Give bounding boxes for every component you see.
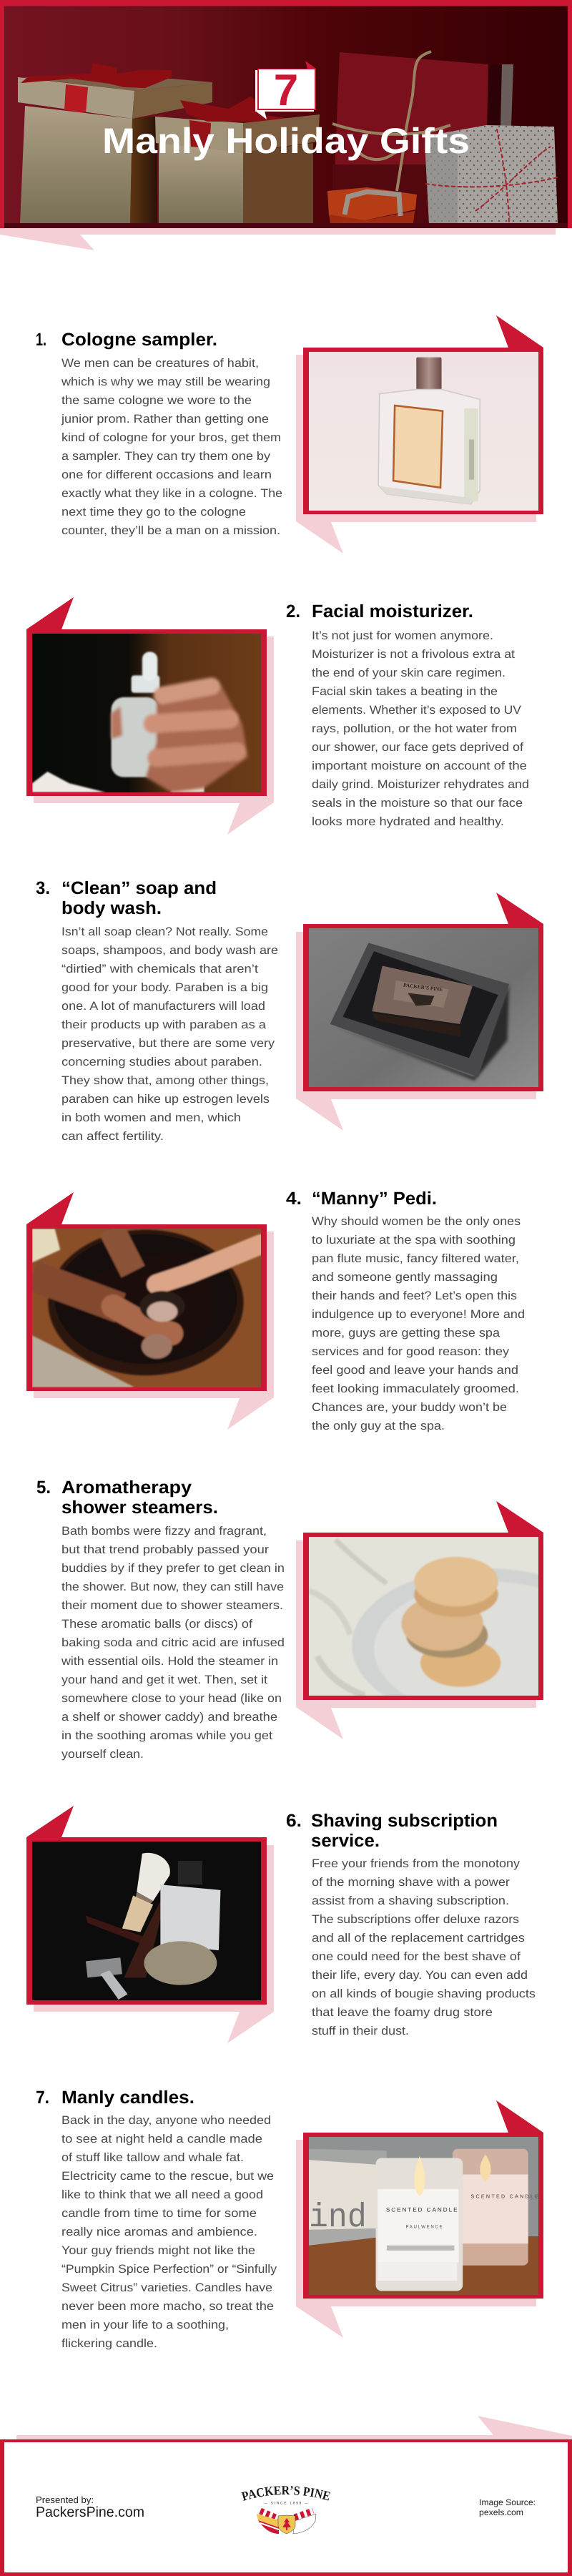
body text 2: It’s not just for women anymore.: [312, 629, 493, 642]
body text 3: paraben can hike up estrogen levels: [61, 1093, 270, 1106]
image source text: pexels.com: [479, 2507, 523, 2517]
logo: Packer's Pine crest: PACKER’S PINE: [241, 2486, 330, 2501]
body text 3: “dirtied” with chemicals that aren’t: [61, 963, 258, 975]
body text 3: preservative, but there are some very: [61, 1037, 275, 1050]
panel: footer: [0, 2416, 572, 2576]
heading 5: 5.: [36, 1478, 51, 1498]
body text 3: their products up with paraben as a: [61, 1018, 267, 1031]
heading 3: body wash.: [61, 898, 162, 918]
body text 1: [61, 357, 282, 537]
heading 2: Facial moisturizer.: [312, 601, 473, 621]
body text 3: soaps, shampoos, and body wash are: [61, 944, 278, 957]
body text 5: with essential oils. Hold the steamer in: [61, 1655, 278, 1668]
heading 5: Aromatherapy: [61, 1478, 192, 1498]
body text 6: on all kinds of bougie shaving products: [312, 1987, 536, 2000]
icon: number 7 speech badge: [255, 61, 316, 119]
title: Manly Holiday Gifts: [102, 121, 470, 161]
body text 1: next time they go to the cologne: [61, 506, 246, 518]
presented by text: [36, 2494, 144, 2520]
body text 2: looks more hydrated and healthy.: [312, 815, 504, 828]
body text 2: daily grind. Moisturizer rehydrates and: [312, 778, 529, 791]
photo: soap bar in dish: PACKER’S PINE: [403, 983, 443, 993]
body text 3: in both women and men, which: [61, 1111, 241, 1124]
panel: item 7 manly candles: [36, 2088, 543, 2350]
pink shadow 5: [296, 1540, 536, 1739]
heading 4: “Manny” Pedi.: [312, 1189, 437, 1209]
photo: shaving brush, bottle and razor: [32, 1842, 261, 2000]
red frame 4: [26, 1192, 267, 1391]
body text 4: feel good and leave your hands and: [312, 1364, 518, 1377]
body text 7: men in your life to a soothing,: [61, 2319, 229, 2331]
body text 1: exactly what they like in a cologne. The: [61, 487, 282, 500]
heading 7: 7.: [36, 2088, 49, 2108]
heading 6: Shaving subscription: [311, 1811, 498, 1831]
body text 2: Moisturizer is not a frivolous extra at: [312, 648, 515, 661]
body text 3: good for your body. Paraben is a big: [61, 981, 268, 994]
heading 5: shower steamers.: [61, 1498, 218, 1518]
pink shadow 3: [296, 932, 536, 1131]
heading 2: 2.: [286, 601, 300, 621]
heading 3: “Clean” soap and: [61, 878, 217, 898]
body text 3: concerning studies about paraben.: [61, 1056, 262, 1068]
body text 1: kind of cologne for your bros, get them: [61, 431, 281, 444]
body text 6: one could need for the best shave of: [312, 1950, 521, 1963]
body text 5: the shower. But now, they can still have: [61, 1580, 284, 1593]
photo: scented candles: ind: [309, 2198, 367, 2236]
body text 4: indulgence up to everyone! More and: [312, 1308, 525, 1321]
photo: scented candles: SCENTED CANDLE: [470, 2193, 538, 2199]
body text 6: stuff in their dust.: [312, 2025, 409, 2037]
panel: item 3 clean soap and body wash: [36, 878, 543, 1143]
body text 2: Facial skin takes a beating in the: [312, 685, 498, 698]
body text 6: The subscriptions offer deluxe razors: [312, 1913, 519, 1926]
body text 6: that leave the foamy drug store: [312, 2006, 493, 2019]
panel: header: [0, 0, 572, 250]
photo: soap bar in dish: [309, 928, 538, 1087]
logo: Packer's Pine crest: [241, 2486, 330, 2535]
body text 1: We men can be creatures of habit,: [61, 357, 259, 370]
panel: item 1 cologne sampler: [36, 315, 543, 554]
body text 3: can affect fertility.: [61, 1130, 164, 1143]
photo: dropper bottle in hand: [32, 634, 261, 792]
body text 2: seals in the moisture so that our face: [312, 797, 523, 810]
heading 1: Cologne sampler.: [61, 330, 217, 350]
presented by text: PackersPine.com: [36, 2504, 144, 2520]
body text 4: more, guys are getting these spa: [312, 1327, 500, 1339]
heading 1: 1.: [36, 330, 46, 350]
heading 4: 4.: [286, 1189, 302, 1209]
body text 6: Free your friends from the monotony: [312, 1857, 521, 1870]
body text 5: buddies by if they prefer to get clean in: [61, 1562, 285, 1575]
body text 7: never been more macho, so treat the: [61, 2300, 274, 2313]
body text 5: baking soda and citric acid are infused: [61, 1636, 285, 1649]
body text 6: and all of the replacement cartridges: [312, 1932, 525, 1945]
body text 4: Why should women be the only ones: [312, 1215, 521, 1228]
red frame 7: [303, 2100, 543, 2299]
pink shadow 7: [296, 2140, 536, 2338]
body text 1: a sampler. They can try them one by: [61, 450, 271, 463]
icon: number 7 speech badge: 7: [274, 66, 298, 115]
photo: scented candles: PAULWENCE: [405, 2224, 443, 2229]
body text 6: assist from a shaving subscription.: [312, 1894, 509, 1907]
red frame 2: [26, 597, 267, 796]
footer frame: [0, 2439, 572, 2576]
heading 5: [36, 1478, 218, 1518]
body text 7: really nice aromas and ambience.: [61, 2226, 257, 2238]
red frame 5: [303, 1501, 543, 1700]
body text 4: services and for good reason: they: [312, 1345, 510, 1358]
body text 7: like to think that we all need a good: [61, 2188, 263, 2201]
photo: scented candles: [309, 2137, 538, 2295]
body text 5: yourself clean.: [61, 1748, 144, 1761]
heading 7: Manly candles.: [61, 2088, 194, 2108]
body text 7: Your guy friends might not like the: [61, 2244, 255, 2257]
pink shadow 1: [296, 355, 536, 554]
heading 6: [286, 1811, 498, 1851]
body text 1: the same cologne we wore to the: [61, 394, 252, 407]
body text 2: important moisture on account of the: [312, 759, 527, 772]
body text 6: their life, every day. You can even add: [312, 1969, 528, 1982]
heading 6: 6.: [286, 1811, 302, 1831]
body text 5: their moment due to shower steamers.: [61, 1599, 283, 1612]
body text 4: feet looking immaculately groomed.: [312, 1382, 519, 1395]
body text 4: [312, 1215, 525, 1432]
header photo: gift boxes: [4, 6, 568, 228]
pink shadow 6: [34, 1845, 274, 2043]
body text 7: candle from time to time for some: [61, 2207, 257, 2220]
panel: item 2 facial moisturizer: [26, 597, 529, 835]
body text 2: the end of your skin care regimen.: [312, 667, 506, 679]
body text 7: [61, 2114, 277, 2350]
footer pink strip with tail: [16, 2416, 572, 2439]
panel: item 5 aromatherapy shower steamers: [36, 1478, 572, 1761]
body text 1: junior prom. Rather than getting one: [61, 413, 269, 426]
body text 5: somewhere close to your head (like on: [61, 1692, 282, 1705]
body text 7: flickering candle.: [61, 2337, 157, 2350]
body text 2: rays, pollution, or the hot water from: [312, 722, 517, 735]
body text 7: Electricity came to the rescue, but we: [61, 2170, 274, 2183]
body text 7: of stuff like tallow and whale fat.: [61, 2151, 244, 2164]
photo: stacked soap discs on plate: [309, 1537, 538, 1696]
body text 5: but that trend probably passed your: [61, 1543, 270, 1556]
panel: item 6 shaving subscription service: [26, 1806, 536, 2043]
red frame 1: [303, 315, 543, 514]
body text 7: to see at night held a candle made: [61, 2133, 262, 2145]
image source text: Image Source:: [479, 2497, 536, 2507]
body text 7: “Pumpkin Spice Perfection” or “Sinfully: [61, 2263, 277, 2276]
body text 5: in the soothing aromas while you get: [61, 1729, 272, 1742]
image source text: [479, 2497, 536, 2517]
photo: foot spa bowl: [32, 1229, 261, 1387]
logo: Packer's Pine crest: — SINCE 1899 —: [264, 2502, 308, 2506]
body text 1: counter, they’ll be a man on a mission.: [61, 524, 280, 537]
heading 3: [36, 878, 217, 918]
heading 3: 3.: [36, 878, 50, 898]
body text 5: a shelf or shower caddy) and breathe: [61, 1711, 277, 1724]
body text 4: their hands and feet? Let’s open this: [312, 1289, 517, 1302]
photo: scented candles: SCENTED CANDLE: [386, 2207, 458, 2213]
heading 6: service.: [311, 1831, 380, 1851]
red frame 3: [303, 893, 543, 1091]
presented by text: Presented by:: [36, 2494, 94, 2505]
body text 7: Back in the day, anyone who needed: [61, 2114, 271, 2127]
body text 4: Chances are, your buddy won’t be: [312, 1401, 507, 1414]
body text 2: our shower, our face gets deprived of: [312, 741, 523, 754]
header pink shadow with tail: [0, 228, 556, 250]
body text 5: Bath bombs were fizzy and fragrant,: [61, 1525, 267, 1538]
body text 6: [312, 1857, 536, 2037]
body text 3: They show that, among other things,: [61, 1074, 269, 1087]
body text 4: and someone gently massaging: [312, 1271, 498, 1284]
body text 3: one. A lot of manufacturers will load: [61, 1000, 265, 1013]
body text 4: pan flute music, fancy filtered water,: [312, 1252, 519, 1265]
body text 5: These aromatic balls (or discs) of: [61, 1618, 252, 1631]
body text 2: elements. Whether it’s exposed to UV: [312, 704, 521, 717]
body text 6: of the morning shave with a power: [312, 1876, 511, 1889]
body text 3: [61, 925, 278, 1143]
header red frame: [0, 0, 572, 228]
body text 1: which is why we may still be wearing: [61, 375, 270, 388]
body text 1: one for different occasions and learn: [61, 468, 272, 481]
body text 5: [61, 1525, 285, 1761]
body text 4: to luxuriate at the spa with soothing: [312, 1234, 516, 1247]
body text 3: Isn’t all soap clean? Not really. Some: [61, 925, 268, 938]
panel: item 4 manny pedi: [26, 1189, 525, 1432]
body text 7: Sweet Citrus” varieties. Candles have: [61, 2281, 272, 2294]
pink shadow 4: [34, 1232, 274, 1430]
photo: cologne bottle: [309, 352, 538, 511]
pink shadow 2: [34, 636, 274, 835]
body text 5: your hand and get it wet. Then, set it: [61, 1673, 267, 1686]
body text 2: [312, 629, 529, 828]
body text 4: the only guy at the spa.: [312, 1420, 445, 1432]
red frame 6: [26, 1806, 267, 2005]
